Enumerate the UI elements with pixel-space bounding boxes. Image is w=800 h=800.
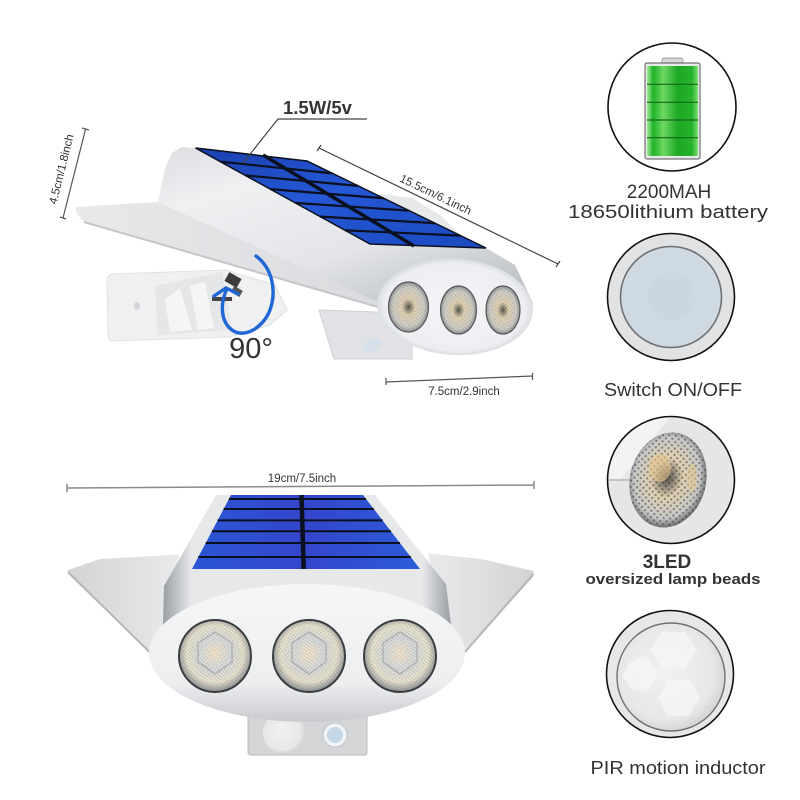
switch text: Switch ON/OFF <box>604 380 742 400</box>
icon: battery <box>608 43 736 171</box>
top lamp: angled side view <box>76 147 535 359</box>
front face with lamps <box>375 255 535 359</box>
LED callout <box>586 415 760 588</box>
bottom lamp: front view <box>68 495 534 755</box>
dimension: width <box>67 473 534 492</box>
icon: PIR dome <box>606 610 734 738</box>
battery callout <box>568 43 768 222</box>
PIR callout <box>590 610 766 778</box>
left wing <box>76 202 378 307</box>
dimension: height: 4.5cm/1.8inch <box>48 133 77 205</box>
rotation arrow 90 degrees: 90° <box>229 333 273 365</box>
rotation arrow 90 degrees <box>214 256 273 365</box>
dimension: width: 19cm/7.5inch <box>268 473 336 485</box>
solar panel <box>192 495 420 569</box>
lamp body <box>163 495 451 625</box>
battery callout: 18650lithium battery <box>568 202 768 222</box>
LED icon ring <box>608 416 734 544</box>
dimension: length <box>317 145 560 267</box>
rear wing <box>380 194 470 245</box>
dimension: depth <box>386 373 532 398</box>
three LEDs <box>179 620 436 692</box>
icon: switch <box>608 234 734 360</box>
dimension: length: 15.5cm/6.1inch <box>398 173 473 218</box>
switch callout <box>604 234 742 400</box>
dimension: height <box>48 128 89 219</box>
LED callout: oversized lamp beads <box>586 572 760 588</box>
left wing <box>68 554 179 652</box>
right wing <box>428 554 534 652</box>
power label with leader line <box>243 97 367 163</box>
wall bracket left <box>107 270 287 341</box>
power label with leader line: 1.5W/5v <box>283 97 353 118</box>
front face <box>149 584 465 722</box>
PIR text: PIR motion inductor <box>590 758 766 778</box>
sensor base <box>248 712 367 755</box>
LED text: 3LED <box>643 552 691 573</box>
lamp body <box>158 147 533 340</box>
battery text: 2200MAH <box>627 182 711 203</box>
dimension: depth: 7.5cm/2.9inch <box>428 386 500 398</box>
icon: LED lens close-up <box>605 415 737 547</box>
solar panel <box>196 148 486 248</box>
lower mount <box>319 310 412 359</box>
